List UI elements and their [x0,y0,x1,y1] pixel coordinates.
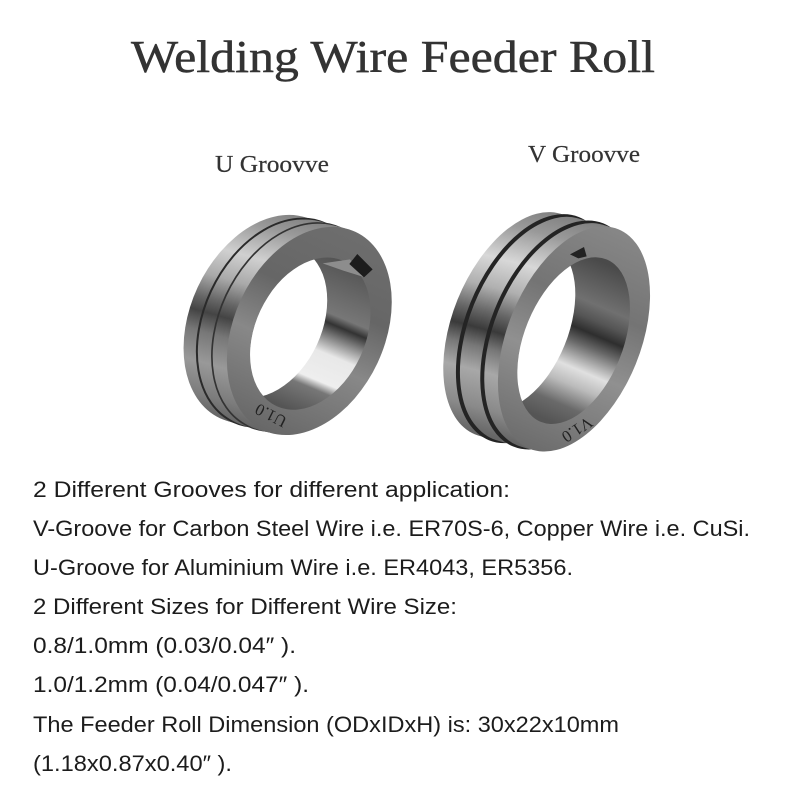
roll outer band with grooves [152,188,419,461]
engraved mark: V1.0 [558,413,596,446]
label: U groove: U Groovve [215,152,329,178]
through hole [517,266,576,402]
line 5: 0.8/1.0mm (0.03/0.04″ ). [33,633,296,658]
line 3: U-Groove for Aluminium Wire i.e. ER4043, ER5356. [33,555,573,580]
icon: U groove roll [184,214,392,435]
inner wall [227,238,394,429]
keyway [323,254,373,277]
icon: V groove roll [443,212,650,452]
engraved mark: U1.0 [252,399,290,431]
line 7: The Feeder Roll Dimension (ODxIDxH) is: 30x22x10mm [33,712,619,737]
inner wall [495,241,652,440]
through hole [250,260,328,396]
front face [468,204,680,474]
roll outer band with grooves [413,190,674,472]
text block: description [33,477,750,776]
keyway [570,247,587,258]
line 2: V-Groove for Carbon Steel Wire i.e. ER70S-6, Copper Wire i.e. CuSi. [33,516,750,541]
line 1: 2 Different Grooves for different application: [33,477,510,502]
front face [195,200,424,462]
title: Welding Wire Feeder Roll [131,31,655,82]
line 4: 2 Different Sizes for Different Wire Size: [33,594,457,619]
line 6: 1.0/1.2mm (0.04/0.047″ ). [33,672,309,697]
line 8: (1.18x0.87x0.40″ ). [33,751,232,776]
label: V groove: V Groovve [528,142,640,168]
